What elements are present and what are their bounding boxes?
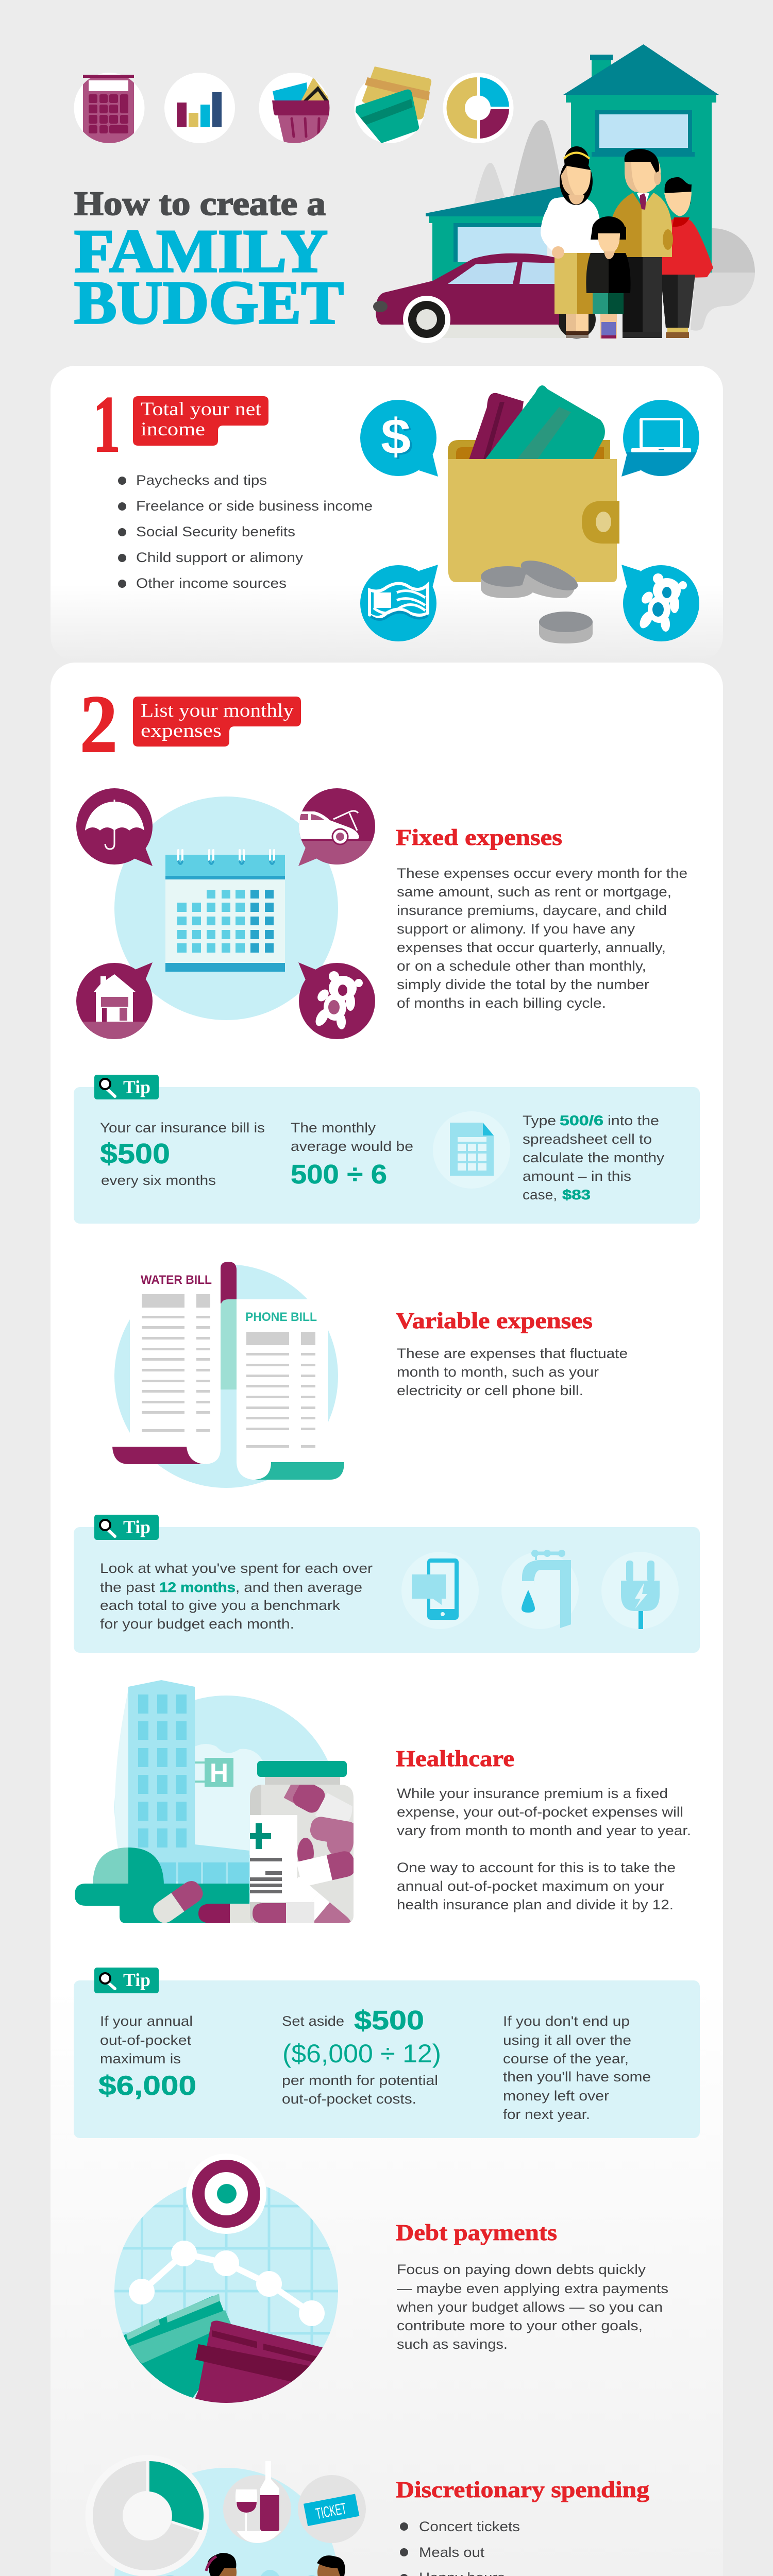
illustration: debt target chart and cards xyxy=(113,2154,340,2411)
car xyxy=(373,253,596,343)
tip text: bill amount xyxy=(100,1120,265,1188)
icon: car bubble xyxy=(296,788,376,867)
illustration: family, house and car xyxy=(373,44,755,343)
tip text: leftover money: for next year. xyxy=(503,2107,590,2122)
tip text: monthly average: average would be xyxy=(291,1139,413,1154)
tip text: bill amount: $500 xyxy=(100,1138,170,1170)
tip text: the past xyxy=(100,1580,156,1595)
tip text: for your budget each month. xyxy=(100,1616,294,1632)
tip text: leftover money: using it all over the xyxy=(503,2032,631,2048)
icon: dollar bubble: $ xyxy=(383,410,413,466)
icon: bar chart xyxy=(164,73,235,143)
tip text: set aside amount: ($6,000 ÷ 12) xyxy=(282,2039,441,2068)
tip text: monthly average xyxy=(291,1120,413,1190)
tip text: spreadsheet formula: into the xyxy=(608,1113,659,1128)
text: healthcare body: expense, your out-of-pocket expenses will xyxy=(397,1804,683,1820)
icon: umbrella bubble xyxy=(76,788,153,866)
text: fixed expenses body xyxy=(397,866,687,1011)
heading: healthcare: Healthcare xyxy=(396,1746,514,1771)
panel: step 2 list your monthly expenses xyxy=(51,663,723,2576)
text: variable expenses body: electricity or cell phone bill. xyxy=(397,1383,583,1398)
green dome and base xyxy=(75,1848,249,1923)
income source list: Child support or alimony xyxy=(136,550,304,565)
income source list: Other income sources xyxy=(136,575,287,591)
text: healthcare body: One way to account for this is to take the xyxy=(397,1860,676,1875)
tip text: set aside amount: per month for potential xyxy=(282,2073,438,2088)
text: debt payments body: such as savings. xyxy=(397,2336,508,2352)
tip text: spreadsheet formula: calculate the monthy xyxy=(523,1150,665,1165)
income source list xyxy=(118,472,373,591)
tip text: bill amount: Your car insurance bill is xyxy=(100,1120,265,1136)
tip text: annual maximum: maximum is xyxy=(100,2051,181,2066)
tip text: set aside amount: $500 xyxy=(354,2006,424,2036)
person: girl xyxy=(586,216,631,338)
text: fixed expenses body: These expenses occur every month for the xyxy=(397,866,687,881)
heading: variable expenses: Variable expenses xyxy=(396,1308,593,1333)
tip text: annual maximum: out-of-pocket xyxy=(100,2032,192,2048)
text: debt payments body: contribute more to your other goals, xyxy=(397,2318,643,2333)
icon: teddy bear bubble xyxy=(621,565,699,641)
text: fixed expenses body: or on a schedule other than monthly, xyxy=(397,958,646,974)
tip text: spreadsheet formula xyxy=(523,1113,665,1202)
background diners xyxy=(166,2570,315,2576)
garage xyxy=(426,186,572,285)
tip text: monthly average: The monthly xyxy=(291,1120,376,1136)
text: variable expenses body: month to month, such as your xyxy=(397,1364,599,1380)
text: debt payments body: Focus on paying down debts quickly xyxy=(397,2262,646,2277)
tip panel: twelve month benchmark xyxy=(74,1515,700,1653)
icon: phone xyxy=(401,1552,479,1629)
tip text: set aside amount xyxy=(282,2006,441,2107)
tip text: spreadsheet formula: spreadsheet cell to xyxy=(523,1131,652,1147)
section: variable expenses xyxy=(112,1262,628,1488)
icon: water tap xyxy=(501,1550,579,1629)
list: discretionary items: Meals out xyxy=(419,2545,485,2560)
tip badge: Tip xyxy=(123,1517,150,1537)
tip text: monthly average: 500 ÷ 6 xyxy=(291,1160,387,1190)
phone bill: PHONE BILL xyxy=(245,1310,317,1324)
text: fixed expenses body: simply divide the total by the number xyxy=(397,977,649,992)
illustration: calendar with bubbles xyxy=(76,788,376,1042)
illustration: couple dining with donut chart xyxy=(86,2455,366,2576)
line chart xyxy=(129,2241,325,2326)
step label: Total your net xyxy=(141,399,262,420)
target xyxy=(186,2154,266,2234)
title line: BUDGET: BUDGET xyxy=(74,268,344,336)
tip badge: Tip xyxy=(123,1970,150,1990)
tip text: , and then average xyxy=(236,1580,362,1595)
text: debt payments body: — maybe even applying extra payments xyxy=(397,2281,668,2296)
step label: expenses xyxy=(141,720,222,741)
tip panel: car insurance xyxy=(74,1075,700,1224)
pills on ground xyxy=(149,1877,253,1927)
tip badge xyxy=(94,1075,159,1099)
illustration: water and phone bills xyxy=(112,1262,344,1488)
illustration: hospital and pill bottle xyxy=(75,1680,359,1944)
list: discretionary items xyxy=(400,2519,710,2576)
heading: discretionary spending: Discretionary spending xyxy=(396,2477,649,2502)
tip text: spreadsheet formula: amount – in this xyxy=(523,1168,631,1184)
step label: List your monthly xyxy=(141,700,294,721)
text: fixed expenses body: support or alimony. If you have any xyxy=(397,921,635,937)
icon: dollar bubble: $ xyxy=(381,409,411,465)
step label: income xyxy=(141,419,205,440)
heading: debt payments: Debt payments xyxy=(396,2220,557,2245)
section: fixed expenses xyxy=(76,788,687,1042)
icon: teddy bear bubble xyxy=(298,962,375,1039)
tip text: annual maximum xyxy=(98,2013,196,2101)
income source list: Freelance or side business income xyxy=(136,498,373,514)
step label xyxy=(133,697,301,747)
text: healthcare body: vary from month to month and year to year. xyxy=(397,1823,691,1838)
panel: step 1 total your net income xyxy=(51,366,723,661)
tip text: spreadsheet formula: Type xyxy=(523,1113,556,1128)
hospital building: H xyxy=(210,1758,228,1788)
house xyxy=(563,44,719,273)
title line: FAMILY: FAMILY xyxy=(74,217,328,285)
tip text: 12 months xyxy=(159,1580,236,1595)
icon: cards xyxy=(355,66,431,143)
text: debt payments body: when your budget allows — so you can xyxy=(396,2299,663,2315)
person: woman xyxy=(541,146,604,338)
heading: fixed expenses: Fixed expenses xyxy=(396,825,562,850)
icon: shopping basket xyxy=(259,73,332,147)
step number 2: 2 xyxy=(80,678,117,770)
icon: dollar bubble xyxy=(360,400,438,477)
person: boy xyxy=(661,177,713,338)
title xyxy=(74,185,344,336)
tip panel: out of pocket maximum xyxy=(74,1968,700,2138)
tip text: spreadsheet formula: $83 xyxy=(562,1187,591,1202)
icon: spreadsheet xyxy=(433,1111,510,1189)
person: man xyxy=(610,149,673,338)
tip text: set aside amount: out-of-pocket costs. xyxy=(282,2091,416,2107)
icon: wallet with cards and coins xyxy=(448,385,619,643)
text: variable expenses body: These are expenses that fluctuate xyxy=(397,1346,628,1361)
tip text: leftover money: course of the year, xyxy=(503,2051,629,2066)
tip text: spreadsheet formula: case, xyxy=(523,1187,557,1202)
icon: money bubble xyxy=(360,565,438,641)
step number 1: 1 xyxy=(93,379,121,469)
section: discretionary spending xyxy=(93,2461,649,2576)
text: fixed expenses body: insurance premiums, daycare, and child xyxy=(397,903,667,918)
tip text: set aside amount: Set aside xyxy=(282,2013,344,2029)
calendar xyxy=(165,850,285,972)
icon: house bubble xyxy=(76,962,153,1042)
person: man xyxy=(273,2555,352,2576)
tip text: bill amount: every six months xyxy=(101,1173,216,1188)
pill bottle xyxy=(250,1761,354,1923)
tip text: annual maximum: $6,000 xyxy=(98,2071,196,2101)
icon: electric plug xyxy=(601,1552,679,1629)
water bill: WATER BILL xyxy=(141,1273,212,1287)
icon: wine bubble xyxy=(223,2461,291,2543)
donut chart xyxy=(86,2455,209,2576)
tip text: spreadsheet formula: 500/6 xyxy=(560,1113,603,1128)
step label xyxy=(133,396,268,446)
water bill xyxy=(112,1262,237,1464)
text: healthcare body xyxy=(397,1786,691,1912)
header icons row xyxy=(74,66,513,147)
text: healthcare body: health insurance plan and divide it by 12. xyxy=(397,1897,674,1912)
icon: ticket bubble: TICKET xyxy=(314,2500,348,2522)
tip text: leftover money: then you'll have some xyxy=(503,2069,651,2084)
text: fixed expenses body: expenses that occur quarterly, annually, xyxy=(397,940,666,955)
trees and shrubs behind house xyxy=(474,120,755,331)
icon: laptop bubble xyxy=(621,400,701,478)
text: variable expenses body xyxy=(397,1346,628,1398)
section: healthcare xyxy=(75,1680,691,1944)
text: healthcare body: annual out-of-pocket maximum on your xyxy=(397,1878,664,1894)
tip text: Look at what you've spent for each over xyxy=(100,1561,373,1576)
tip text: each total to give you a benchmark xyxy=(100,1598,341,1613)
tip text xyxy=(100,1561,373,1632)
icon: ticket bubble xyxy=(298,2475,366,2543)
tip text: leftover money: money left over xyxy=(503,2088,609,2104)
text: fixed expenses body: of months in each billing cycle. xyxy=(397,995,606,1011)
text: fixed expenses body: same amount, such as rent or mortgage, xyxy=(397,884,671,900)
tip text: leftover money: If you don't end up xyxy=(503,2013,630,2029)
person: woman xyxy=(197,2553,278,2576)
tip badge xyxy=(94,1968,159,1993)
section: debt payments xyxy=(113,2154,668,2411)
text: healthcare body: While your insurance premium is a fixed xyxy=(397,1786,668,1801)
tip text: leftover money xyxy=(503,2013,651,2122)
icon: donut chart xyxy=(443,73,513,143)
tip badge xyxy=(94,1515,159,1540)
hospital building xyxy=(128,1680,249,1884)
text: debt payments body xyxy=(396,2262,668,2352)
phone bill xyxy=(221,1299,344,1480)
list: discretionary items: Concert tickets xyxy=(419,2519,520,2534)
icon: calculator xyxy=(74,73,144,147)
tip badge: Tip xyxy=(123,1077,150,1097)
income source list: Social Security benefits xyxy=(136,524,295,539)
tip text: annual maximum: If your annual xyxy=(100,2013,193,2029)
title line: How to create a: How to create a xyxy=(74,185,326,223)
income source list: Paychecks and tips xyxy=(136,472,267,488)
